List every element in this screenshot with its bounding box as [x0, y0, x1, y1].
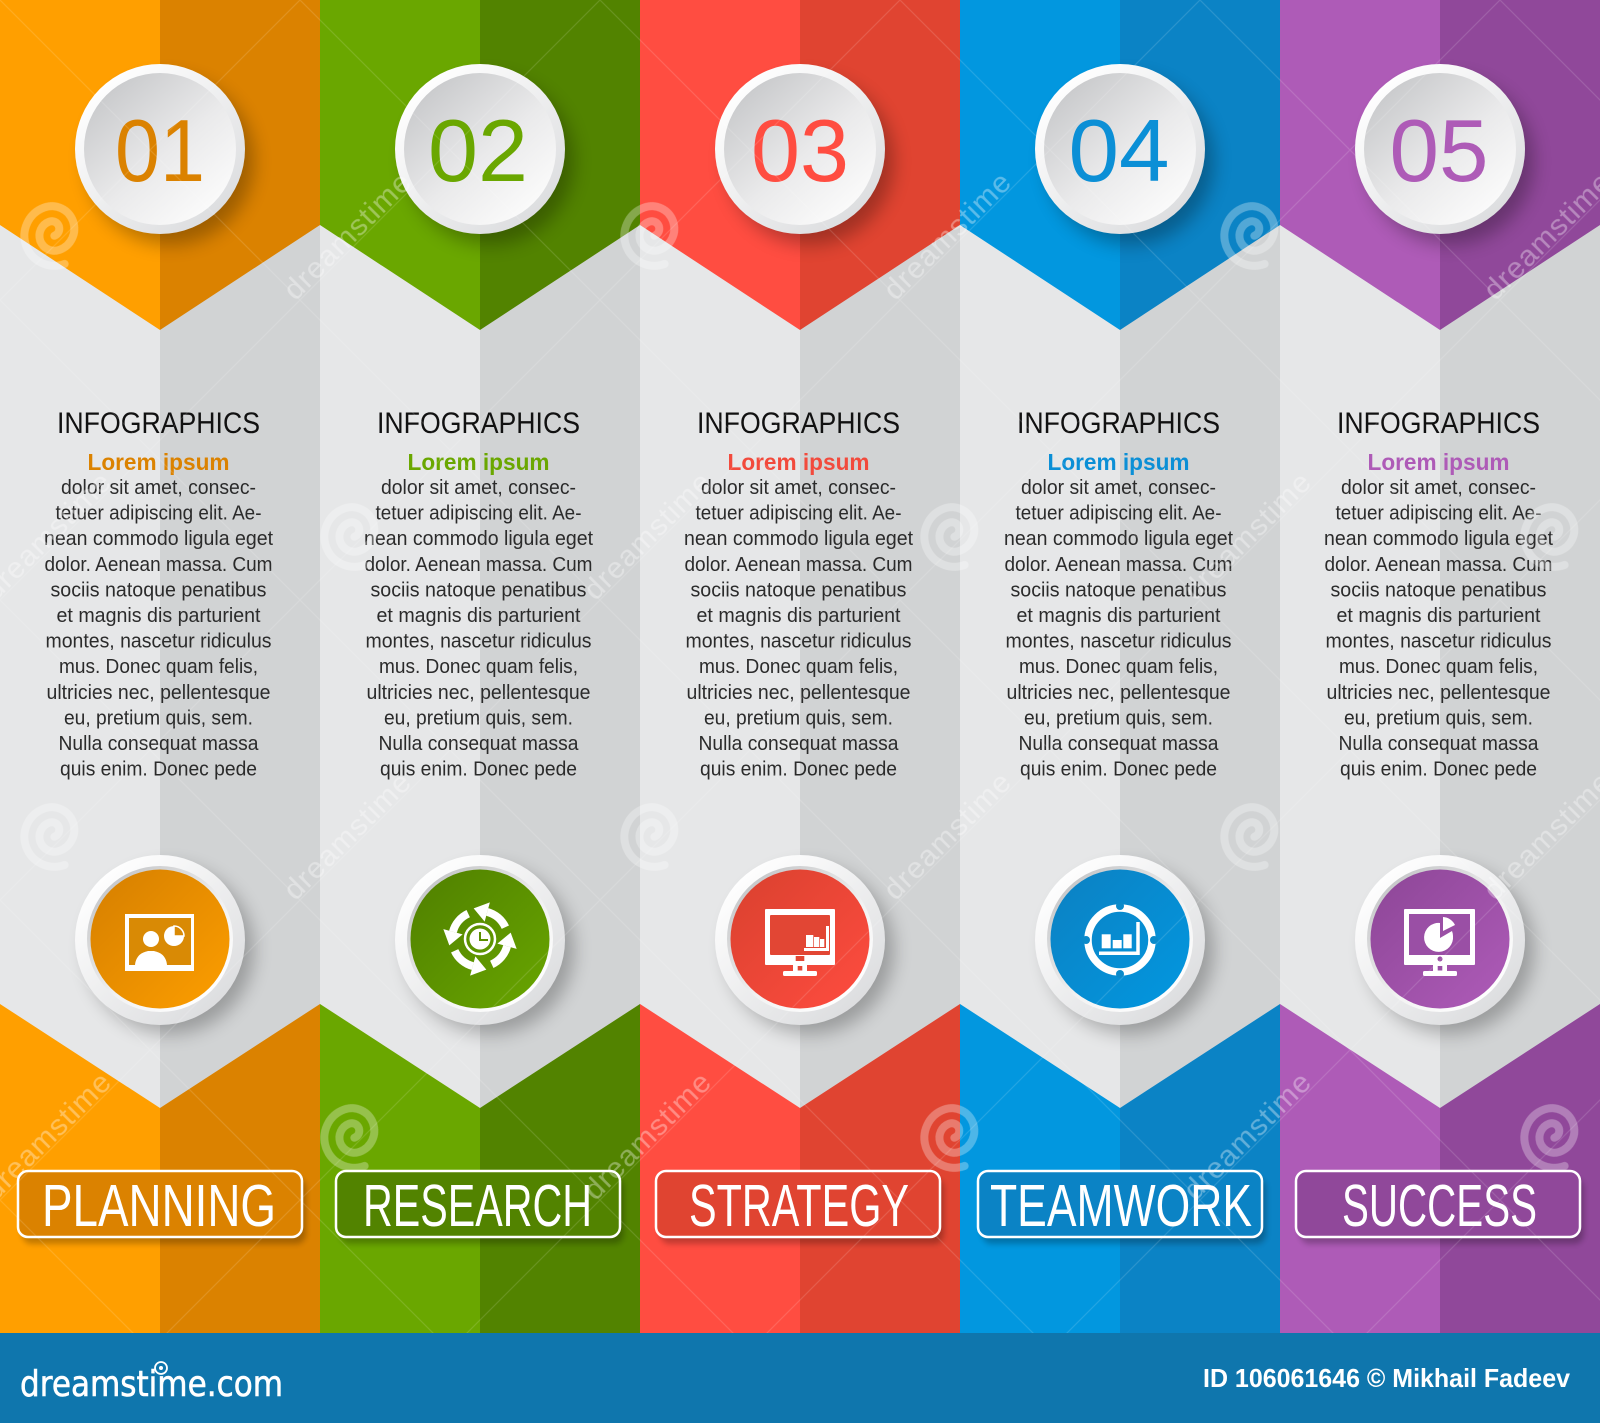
body text: [364, 476, 593, 781]
heading: INFOGRAPHICS: [57, 407, 260, 440]
icon badge: monitor with bar chart: [715, 855, 894, 1034]
body text: quis enim. Donec pede: [700, 758, 897, 781]
body text: [1004, 476, 1233, 781]
subheading: Lorem ipsum: [1048, 449, 1190, 475]
body text: sociis natoque penatibus: [50, 578, 266, 601]
body text: quis enim. Donec pede: [1020, 758, 1217, 781]
column background: [960, 0, 1280, 1333]
watermark overlay: dreamstime: [1177, 466, 1318, 607]
number badge 02: [395, 64, 574, 245]
body text: Nulla consequat massa: [378, 732, 579, 755]
body text: [684, 476, 913, 781]
body text: [1324, 476, 1553, 781]
body text: dolor. Aenean massa. Cum: [44, 553, 272, 576]
icon badge: presenter tablet: [75, 855, 254, 1034]
body text: sociis natoque penatibus: [1010, 578, 1226, 601]
body text: montes, nascetur ridiculus: [366, 630, 592, 653]
body text: dolor sit amet, consec-: [701, 476, 896, 499]
body text: ultricies nec, pellentesque: [686, 681, 910, 704]
subheading: Lorem ipsum: [408, 449, 550, 475]
column 3: strategy: [640, 0, 960, 1333]
body text: eu, pretium quis, sem.: [64, 706, 253, 729]
body text: dolor. Aenean massa. Cum: [1324, 553, 1552, 576]
body text: dolor. Aenean massa. Cum: [1004, 553, 1232, 576]
heading: INFOGRAPHICS: [697, 407, 900, 440]
body text: mus. Donec quam felis,: [699, 655, 898, 678]
body text: tetuer adipiscing elit. Ae-: [696, 502, 902, 525]
body text: eu, pretium quis, sem.: [1024, 706, 1213, 729]
column background: [320, 0, 640, 1333]
icon badge: monitor with pie chart: [1355, 855, 1534, 1034]
body text: quis enim. Donec pede: [380, 758, 577, 781]
number badge 01: 01: [115, 101, 205, 200]
body text: dolor. Aenean massa. Cum: [684, 553, 912, 576]
column background: [640, 0, 960, 1333]
label: planning: PLANNING: [42, 1173, 276, 1239]
body text: et magnis dis parturient: [1336, 604, 1541, 627]
watermark overlay: dreamstime: [877, 166, 1018, 307]
body text: mus. Donec quam felis,: [1019, 655, 1218, 678]
watermark overlay: dreamstime: [877, 766, 1018, 907]
heading: INFOGRAPHICS: [1017, 407, 1220, 440]
footer bar: [0, 1333, 1600, 1423]
body text: et magnis dis parturient: [376, 604, 581, 627]
body text: Nulla consequat massa: [1338, 732, 1539, 755]
label: teamwork: TEAMWORK: [990, 1173, 1252, 1239]
body text: sociis natoque penatibus: [690, 578, 906, 601]
footer credit: ID 106061646 © Mikhail Fadeev: [1203, 1363, 1571, 1393]
body text: nean commodo ligula eget: [1004, 527, 1233, 550]
body text: tetuer adipiscing elit. Ae-: [376, 502, 582, 525]
label: strategy: STRATEGY: [689, 1173, 909, 1239]
number badge 05: 05: [1390, 101, 1488, 200]
body text: dolor. Aenean massa. Cum: [364, 553, 592, 576]
body text: Nulla consequat massa: [698, 732, 899, 755]
body text: dolor sit amet, consec-: [61, 476, 256, 499]
body text: ultricies nec, pellentesque: [1326, 681, 1550, 704]
body text: dolor sit amet, consec-: [381, 476, 576, 499]
body text: montes, nascetur ridiculus: [1326, 630, 1552, 653]
body text: [44, 476, 273, 781]
column background: [0, 0, 320, 1333]
body text: ultricies nec, pellentesque: [46, 681, 270, 704]
number badge 03: 03: [751, 101, 849, 200]
watermark overlay: dreamstime: [277, 766, 418, 907]
body text: Nulla consequat massa: [58, 732, 259, 755]
body text: nean commodo ligula eget: [684, 527, 913, 550]
body text: eu, pretium quis, sem.: [1344, 706, 1533, 729]
icon badge: target with bars: [1035, 855, 1214, 1034]
body text: Nulla consequat massa: [1018, 732, 1219, 755]
body text: nean commodo ligula eget: [364, 527, 593, 550]
body text: quis enim. Donec pede: [60, 758, 257, 781]
body text: et magnis dis parturient: [696, 604, 901, 627]
body text: et magnis dis parturient: [56, 604, 261, 627]
watermark overlay: dreamstime: [577, 466, 718, 607]
number badge 01: [75, 64, 254, 245]
body text: tetuer adipiscing elit. Ae-: [56, 502, 262, 525]
watermark overlay: dreamstime: [277, 166, 418, 307]
body text: tetuer adipiscing elit. Ae-: [1336, 502, 1542, 525]
subheading: Lorem ipsum: [1368, 449, 1510, 475]
icon badge: cycle arrows: [395, 855, 574, 1034]
footer logo: dreamstime.com: [20, 1364, 283, 1405]
watermark overlay: dreamstime: [1177, 1066, 1318, 1207]
body text: nean commodo ligula eget: [1324, 527, 1553, 550]
body text: dolor sit amet, consec-: [1021, 476, 1216, 499]
heading: INFOGRAPHICS: [377, 407, 580, 440]
column 5: success: [1280, 0, 1600, 1333]
body text: sociis natoque penatibus: [370, 578, 586, 601]
label: research: RESEARCH: [363, 1173, 592, 1239]
subheading: Lorem ipsum: [88, 449, 230, 475]
body text: sociis natoque penatibus: [1330, 578, 1546, 601]
body text: mus. Donec quam felis,: [1339, 655, 1538, 678]
body text: montes, nascetur ridiculus: [1006, 630, 1232, 653]
number badge 04: 04: [1068, 101, 1170, 200]
body text: ultricies nec, pellentesque: [366, 681, 590, 704]
body text: mus. Donec quam felis,: [379, 655, 578, 678]
body text: quis enim. Donec pede: [1340, 758, 1537, 781]
label: research: [336, 1171, 624, 1244]
body text: ultricies nec, pellentesque: [1006, 681, 1230, 704]
column 2: research: [320, 0, 640, 1333]
body text: nean commodo ligula eget: [44, 527, 273, 550]
number badge 05: [1355, 64, 1534, 245]
body text: et magnis dis parturient: [1016, 604, 1221, 627]
body text: eu, pretium quis, sem.: [384, 706, 573, 729]
label: strategy: [656, 1171, 944, 1244]
number badge 03: [715, 64, 894, 245]
body text: montes, nascetur ridiculus: [46, 630, 272, 653]
column background: [1280, 0, 1600, 1333]
body text: mus. Donec quam felis,: [59, 655, 258, 678]
column 1: planning: [0, 0, 320, 1333]
watermark overlay: dreamstime: [577, 1066, 718, 1207]
heading: INFOGRAPHICS: [1337, 407, 1540, 440]
body text: dolor sit amet, consec-: [1341, 476, 1536, 499]
number badge 02: 02: [428, 101, 528, 200]
body text: eu, pretium quis, sem.: [704, 706, 893, 729]
body text: tetuer adipiscing elit. Ae-: [1016, 502, 1222, 525]
column 4: teamwork: [960, 0, 1280, 1333]
number badge 04: [1035, 64, 1214, 245]
subheading: Lorem ipsum: [728, 449, 870, 475]
body text: montes, nascetur ridiculus: [686, 630, 912, 653]
